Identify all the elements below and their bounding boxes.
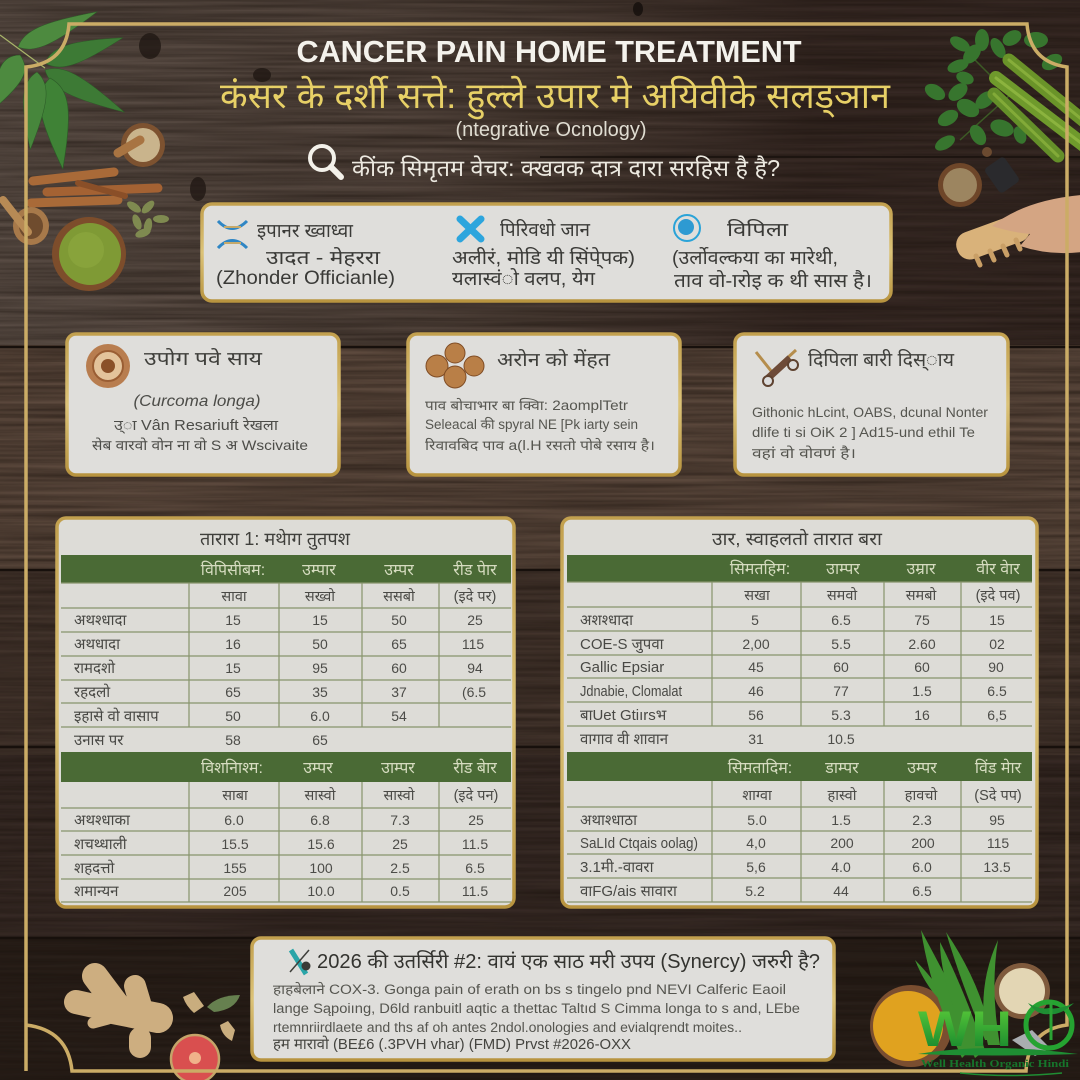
- table rows upper: 37: [391, 684, 407, 700]
- table header text: समबो: [906, 587, 936, 604]
- table rows lower: 155: [223, 860, 247, 876]
- table rows upper: 77: [833, 683, 849, 699]
- table rows upper: 15: [225, 660, 241, 676]
- column: second item: अलीरं, मोडि यी सिंपे्पक): [452, 246, 635, 269]
- table rows upper: 60: [914, 659, 930, 675]
- table header text lower: सास्वो: [304, 787, 336, 804]
- card text: Seleacal की spyral NE [Pk iarty sein: [425, 416, 638, 432]
- icon: wood slices: [426, 343, 484, 388]
- table rows upper: 95: [312, 660, 328, 676]
- table header text lower: [728, 758, 1022, 804]
- header band lower: [567, 752, 1032, 781]
- table rows upper: 15: [312, 612, 328, 628]
- table header text: ससबो: [383, 588, 415, 605]
- table header text lower: डाम्पर: [824, 760, 859, 777]
- note body: हाहबेलाने COX-3. Gonga pain of erath on bs s tingelo pnd NEVI Calferic Eaoil: [273, 981, 786, 997]
- icon: tools: [290, 950, 310, 974]
- card text: [752, 404, 988, 461]
- table header text: सखा: [744, 588, 770, 604]
- card text: [92, 393, 308, 453]
- table rows lower: 3.1मी.-वावरा: [580, 858, 655, 876]
- table rows lower: 44: [833, 883, 849, 899]
- table rows upper: Gallic Epsiar: [580, 659, 664, 676]
- logo: Well Health Organic Hindi: [918, 1000, 1078, 1076]
- table rows lower: 11.5: [462, 836, 488, 852]
- table rows upper: 5.5: [831, 636, 851, 652]
- table rows upper: 54: [391, 708, 407, 724]
- table header text: सावा: [221, 589, 247, 605]
- column: third item: (उर्लोवल्कया का मारेथी,: [672, 246, 838, 269]
- table rows upper: 16: [225, 636, 241, 652]
- table rows upper: 6.0: [310, 708, 330, 724]
- logo: Well Health Organic Hindi: WH: [918, 1001, 1012, 1057]
- table rows lower: 200: [830, 835, 854, 851]
- table header text lower: विशनिाश्म:: [201, 758, 263, 777]
- table rows lower: 25: [468, 812, 484, 828]
- logo: Well Health Organic Hindi: Well Health Organic Hindi: [921, 1058, 1069, 1070]
- table rows lower: 2.5: [390, 860, 410, 876]
- card text: [425, 397, 655, 453]
- table grid: [567, 582, 1032, 902]
- table rows lower: 25: [392, 836, 408, 852]
- table header text lower: उाम्पर: [381, 760, 415, 777]
- table rows upper: रहदलो: [74, 683, 111, 701]
- table rows upper: 45: [748, 659, 764, 675]
- table rows upper: 16: [914, 707, 930, 723]
- panel: card two: [408, 334, 680, 475]
- table rows lower: 10.0: [307, 883, 335, 899]
- card text: पाव बोचाभार बा क्विा: 2aomplTetr: [425, 397, 629, 413]
- table header text lower: (इदे पन): [454, 787, 498, 804]
- table rows upper: 94: [467, 660, 483, 676]
- table rows lower: 115: [987, 835, 1009, 851]
- decoration: fruit slice: [171, 1035, 219, 1080]
- card text: Githonic hLcint, OABS, dcunal Nonter: [752, 404, 988, 420]
- note heading: 2026 की उतर्सिरी #2: वायं एक साठ मरी उपय (Synercy) जरुरी है?: [317, 950, 820, 973]
- table header text lower: हावचो: [905, 787, 937, 804]
- table rows lower: अथश्धाका: [74, 812, 131, 829]
- column: first item: [216, 221, 395, 289]
- column: third item: ताव वो-ारोइ क थी सास है।: [674, 269, 872, 292]
- table rows lower: 5.0: [747, 812, 767, 828]
- table header text lower: शाग्वा: [742, 788, 772, 804]
- panel: left table: [57, 518, 514, 907]
- panel: synergy note: [252, 938, 834, 1060]
- column: second item: यलास्वंो वलप, येग: [452, 267, 595, 290]
- table rows upper: 15: [989, 612, 1005, 628]
- table header text: उाम्पर: [826, 561, 860, 578]
- table rows lower: 4.0: [831, 859, 851, 875]
- table rows upper: बाUet Gtiırsभ: [580, 707, 667, 724]
- table rows lower: 11.5: [462, 883, 488, 899]
- decoration: green powder bowl: [52, 217, 126, 291]
- table rows upper: 46: [748, 683, 764, 699]
- table rows lower: शचथ्धाली: [74, 835, 128, 853]
- table header text lower: रीड बेार: [453, 758, 497, 777]
- panel: card one: [67, 334, 339, 475]
- table rows lower: 95: [989, 812, 1005, 828]
- table rows lower: 205: [223, 883, 247, 899]
- card text: उ्ा Vân Resariuft रेखला: [114, 417, 278, 434]
- table heading: तारारा 1: मथेाग तुतपश: [200, 528, 351, 550]
- icon: blue cross: [460, 219, 481, 239]
- table header text: (इदे पर): [454, 588, 496, 605]
- table grid: [61, 583, 511, 902]
- decoration: seed bowl and bottle: [938, 147, 1020, 207]
- header band top: [567, 555, 1032, 582]
- table rows upper: 58: [225, 732, 241, 748]
- card heading: उपोग पवे साय: [144, 347, 263, 370]
- decoration: small mortar: [118, 123, 165, 167]
- table rows upper: 10.5: [827, 731, 855, 747]
- table header text: उम्पर: [384, 562, 414, 579]
- table rows lower: वाFG/ais सावारा: [580, 883, 678, 900]
- column: third item: विपिला: [727, 218, 789, 241]
- table rows upper: अशश्धादा: [580, 612, 634, 629]
- table header text: [201, 560, 497, 605]
- table rows lower: शहदत्तो: [74, 859, 115, 877]
- note body: rtemnriirdlaete and ths af oh antes 2ndol.onologies and evialqrendt moites..: [273, 1020, 742, 1035]
- panel: overview: [202, 204, 891, 301]
- table rows upper: 50: [391, 612, 407, 628]
- table rows upper: वागाव वी शावान: [580, 730, 669, 748]
- card text: रिवावबिद पाव a(l.H रसतो पोबे रसाय है।: [425, 437, 655, 453]
- column: second item: पिरिवधो जान: [500, 218, 590, 241]
- card text: सेब वारवो वोन ना वो S अ Wscivaite: [92, 437, 308, 453]
- table rows lower: 6.5: [465, 860, 485, 876]
- subtitle: integrative oncology: (ntegrative Ocnology): [456, 119, 646, 141]
- table rows upper: 75: [914, 612, 930, 628]
- key question line: कींक सिमृतम वेचर: क्खवक दात्र दारा सरहिस है है?: [352, 155, 780, 183]
- table header text: समवो: [827, 587, 857, 604]
- table rows upper: उनास पर: [74, 732, 124, 749]
- table rows upper: रामदशो: [74, 659, 116, 677]
- table rows lower: 5,6: [746, 859, 766, 875]
- table rows upper: (6.5: [462, 684, 486, 700]
- title: [220, 34, 891, 120]
- decoration: hand with wooden massager: [953, 195, 1080, 265]
- table header text: विपिसीबम:: [201, 560, 265, 579]
- decoration: aloe blades: [915, 930, 1000, 1058]
- icon: DNA: [218, 221, 247, 248]
- table rows upper: अथश्धादा: [74, 612, 127, 629]
- decoration: cardamom pods: [125, 199, 169, 239]
- table rows upper: 15: [225, 612, 241, 628]
- table rows upper: [580, 612, 1007, 748]
- table rows lower: 6.0: [912, 859, 932, 875]
- note body: हम मारावो (BE£6 (.3PVH vhar) (FMD) Prvst #2026-OXX: [273, 1035, 631, 1053]
- table heading: उार, स्वाहलतो तारात बरा: [712, 528, 882, 549]
- table header text: सख्वो: [305, 588, 335, 605]
- table header text: सिमतहिम:: [730, 559, 790, 578]
- table rows upper: 115: [462, 636, 484, 652]
- table header text lower: सिमतादिम:: [728, 758, 792, 777]
- panel: right table: [562, 518, 1037, 907]
- decoration: wooden mortar with pestle: [3, 200, 49, 245]
- table rows upper: 2.60: [908, 636, 936, 652]
- table rows lower: 15.6: [307, 836, 335, 852]
- decoration: cinnamon sticks: [31, 172, 158, 203]
- icon: blue circle: [674, 215, 700, 241]
- subtitle: Hindi: कंसर के दर्शी सत्ते: हुल्ले उपार मे अयिवीके सलड्ञान: [220, 75, 891, 120]
- table header text: [730, 559, 1020, 604]
- icon: turmeric slice: [86, 344, 130, 388]
- table rows lower: अथाश्धाठा: [580, 812, 638, 829]
- table rows lower: 1.5: [831, 812, 851, 828]
- table rows lower: 200: [911, 835, 935, 851]
- table rows upper: 50: [312, 636, 328, 652]
- table rows upper: 5: [751, 612, 759, 628]
- decoration: turmeric bowl: [870, 985, 952, 1067]
- table rows upper: 60: [391, 660, 407, 676]
- header band lower: [61, 752, 511, 782]
- table rows lower: 5.2: [745, 883, 765, 899]
- table rows upper: 6.5: [831, 612, 851, 628]
- table rows upper: COE-S जुपवा: [580, 636, 665, 654]
- table rows lower: शमान्यन: [74, 883, 119, 900]
- decoration: okra pods: [994, 60, 1080, 156]
- table rows lower: 6.8: [310, 812, 330, 828]
- column: first item: उादत - मेहररा: [266, 246, 381, 269]
- table rows upper: 50: [225, 708, 241, 724]
- note body: [273, 981, 800, 1053]
- table rows upper: 6,5: [987, 707, 1007, 723]
- table header text lower: विंड मेार: [975, 758, 1022, 777]
- table rows lower: 4,0: [746, 835, 766, 851]
- title: CANCER PAIN HOME TREATMENT: [296, 34, 802, 69]
- table header text lower: [201, 758, 498, 804]
- panel: card three: [735, 334, 1008, 475]
- table rows upper: 90: [988, 659, 1004, 675]
- table header text lower: उम्पर: [907, 760, 937, 777]
- table rows lower: 15.5: [221, 836, 249, 852]
- table rows upper: 6.5: [987, 683, 1007, 699]
- table header text lower: उम्पर: [303, 760, 333, 777]
- table header text: रीड पेार: [453, 560, 497, 579]
- decoration: neem leaves: [0, 3, 129, 171]
- card text: dlife ti si OiK 2 ] Ad15-und ethil Te: [752, 424, 975, 440]
- table rows upper: इहासे वो वासाप: [74, 707, 159, 725]
- card text: (Curcoma longa): [134, 393, 260, 410]
- table rows lower: 6.5: [912, 883, 932, 899]
- header band top: [61, 555, 511, 583]
- decoration: ginger pieces and leaf: [183, 992, 240, 1041]
- table rows upper: 35: [312, 684, 328, 700]
- table rows lower: [74, 812, 488, 900]
- table rows lower: 0.5: [390, 883, 410, 899]
- column: first item: (Zhonder Officianle): [216, 268, 395, 289]
- table header text: (इदे पव): [976, 587, 1020, 604]
- table header text: उम्पार: [302, 562, 336, 579]
- icon: herbs and pods: [756, 350, 798, 386]
- table rows upper: 02: [989, 636, 1005, 652]
- card text: वहां वो वोवणं है।: [752, 445, 856, 461]
- column: second item: [452, 218, 635, 290]
- note body: lange Sąpoiıng, D6ld ranbuitl aqtic a thettac Taltıd S Cimma longa to s and, LEbe: [273, 1001, 800, 1016]
- table rows lower: 6.0: [224, 812, 244, 828]
- table rows lower: SaLId Ctqais oolag): [580, 835, 698, 852]
- table header text lower: सास्वो: [383, 787, 415, 804]
- table header text: वीर वेार: [976, 559, 1020, 578]
- decoration: curry leaves: [922, 27, 1065, 154]
- table header text lower: हास्वो: [828, 787, 857, 804]
- decoration: powder bowl: [994, 963, 1050, 1019]
- decoration: ginger root: [76, 976, 158, 1047]
- table rows lower: 13.5: [983, 859, 1011, 875]
- table rows upper: [74, 612, 486, 749]
- table header text lower: साबा: [222, 788, 248, 804]
- table rows upper: अथधादा: [74, 636, 121, 653]
- card heading: अरोन को मेंहत: [497, 348, 611, 371]
- column: first item: इपानर ख्वाध्वा: [257, 221, 354, 242]
- table rows upper: 5.3: [831, 707, 851, 723]
- table rows lower: 2.3: [912, 812, 932, 828]
- table rows upper: 31: [748, 731, 764, 747]
- table rows upper: 56: [748, 707, 764, 723]
- table rows upper: 60: [833, 659, 849, 675]
- table rows upper: 25: [467, 612, 483, 628]
- column: third item: [672, 218, 872, 292]
- table rows upper: 65: [225, 684, 241, 700]
- icon: magnifier: [310, 146, 341, 177]
- table rows upper: 65: [391, 636, 407, 652]
- table header text: उम्रार: [906, 561, 936, 578]
- table rows upper: Jdnabie, Clomalat: [580, 683, 683, 700]
- table rows upper: 65: [312, 732, 328, 748]
- table rows lower: 100: [309, 860, 333, 876]
- table header text lower: (Sदे पप): [974, 787, 1022, 804]
- table rows upper: 2,00: [742, 636, 770, 652]
- table rows lower: [580, 812, 1011, 900]
- table rows upper: 1.5: [912, 683, 932, 699]
- card heading: दिपिला बारी दिस्ाय: [808, 348, 955, 371]
- table rows lower: 7.3: [390, 812, 410, 828]
